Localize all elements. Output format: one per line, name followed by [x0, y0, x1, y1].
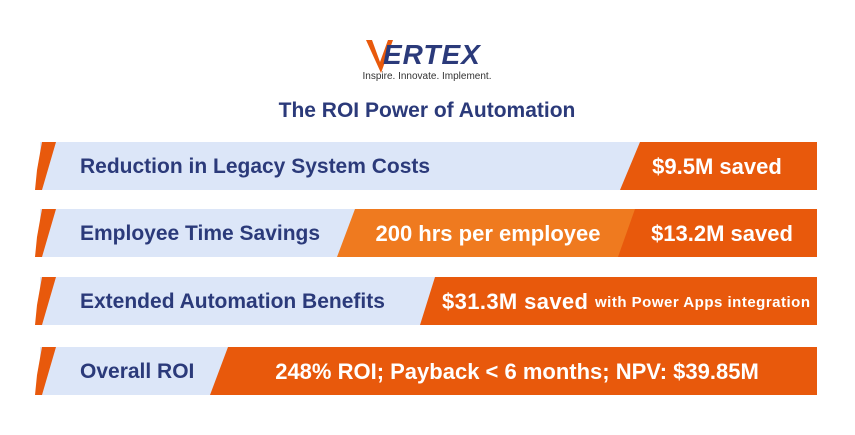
row 3: $31.3M saved: [442, 289, 588, 314]
logo: [363, 39, 491, 82]
row 4: Overall ROI: [80, 360, 194, 383]
row 4: [35, 347, 817, 395]
row 2: $13.2M saved: [651, 221, 793, 246]
logo: Inspire. Innovate. Implement.: [363, 71, 491, 82]
logo: ERTEX: [383, 39, 482, 70]
row 3: Extended Automation Benefits: [80, 290, 385, 313]
row 4: 248% ROI; Payback < 6 months; NPV: $39.85M: [275, 359, 759, 384]
row 1: [35, 142, 817, 190]
row 3: [35, 277, 817, 325]
row 2: Employee Time Savings: [80, 222, 320, 245]
title: The ROI Power of Automation: [279, 99, 575, 122]
row 1: Reduction in Legacy System Costs: [80, 155, 430, 178]
row 3: with Power Apps integration: [594, 294, 810, 311]
row 2: [35, 209, 817, 257]
row 1: $9.5M saved: [652, 154, 782, 179]
row 2: 200 hrs per employee: [375, 221, 601, 246]
